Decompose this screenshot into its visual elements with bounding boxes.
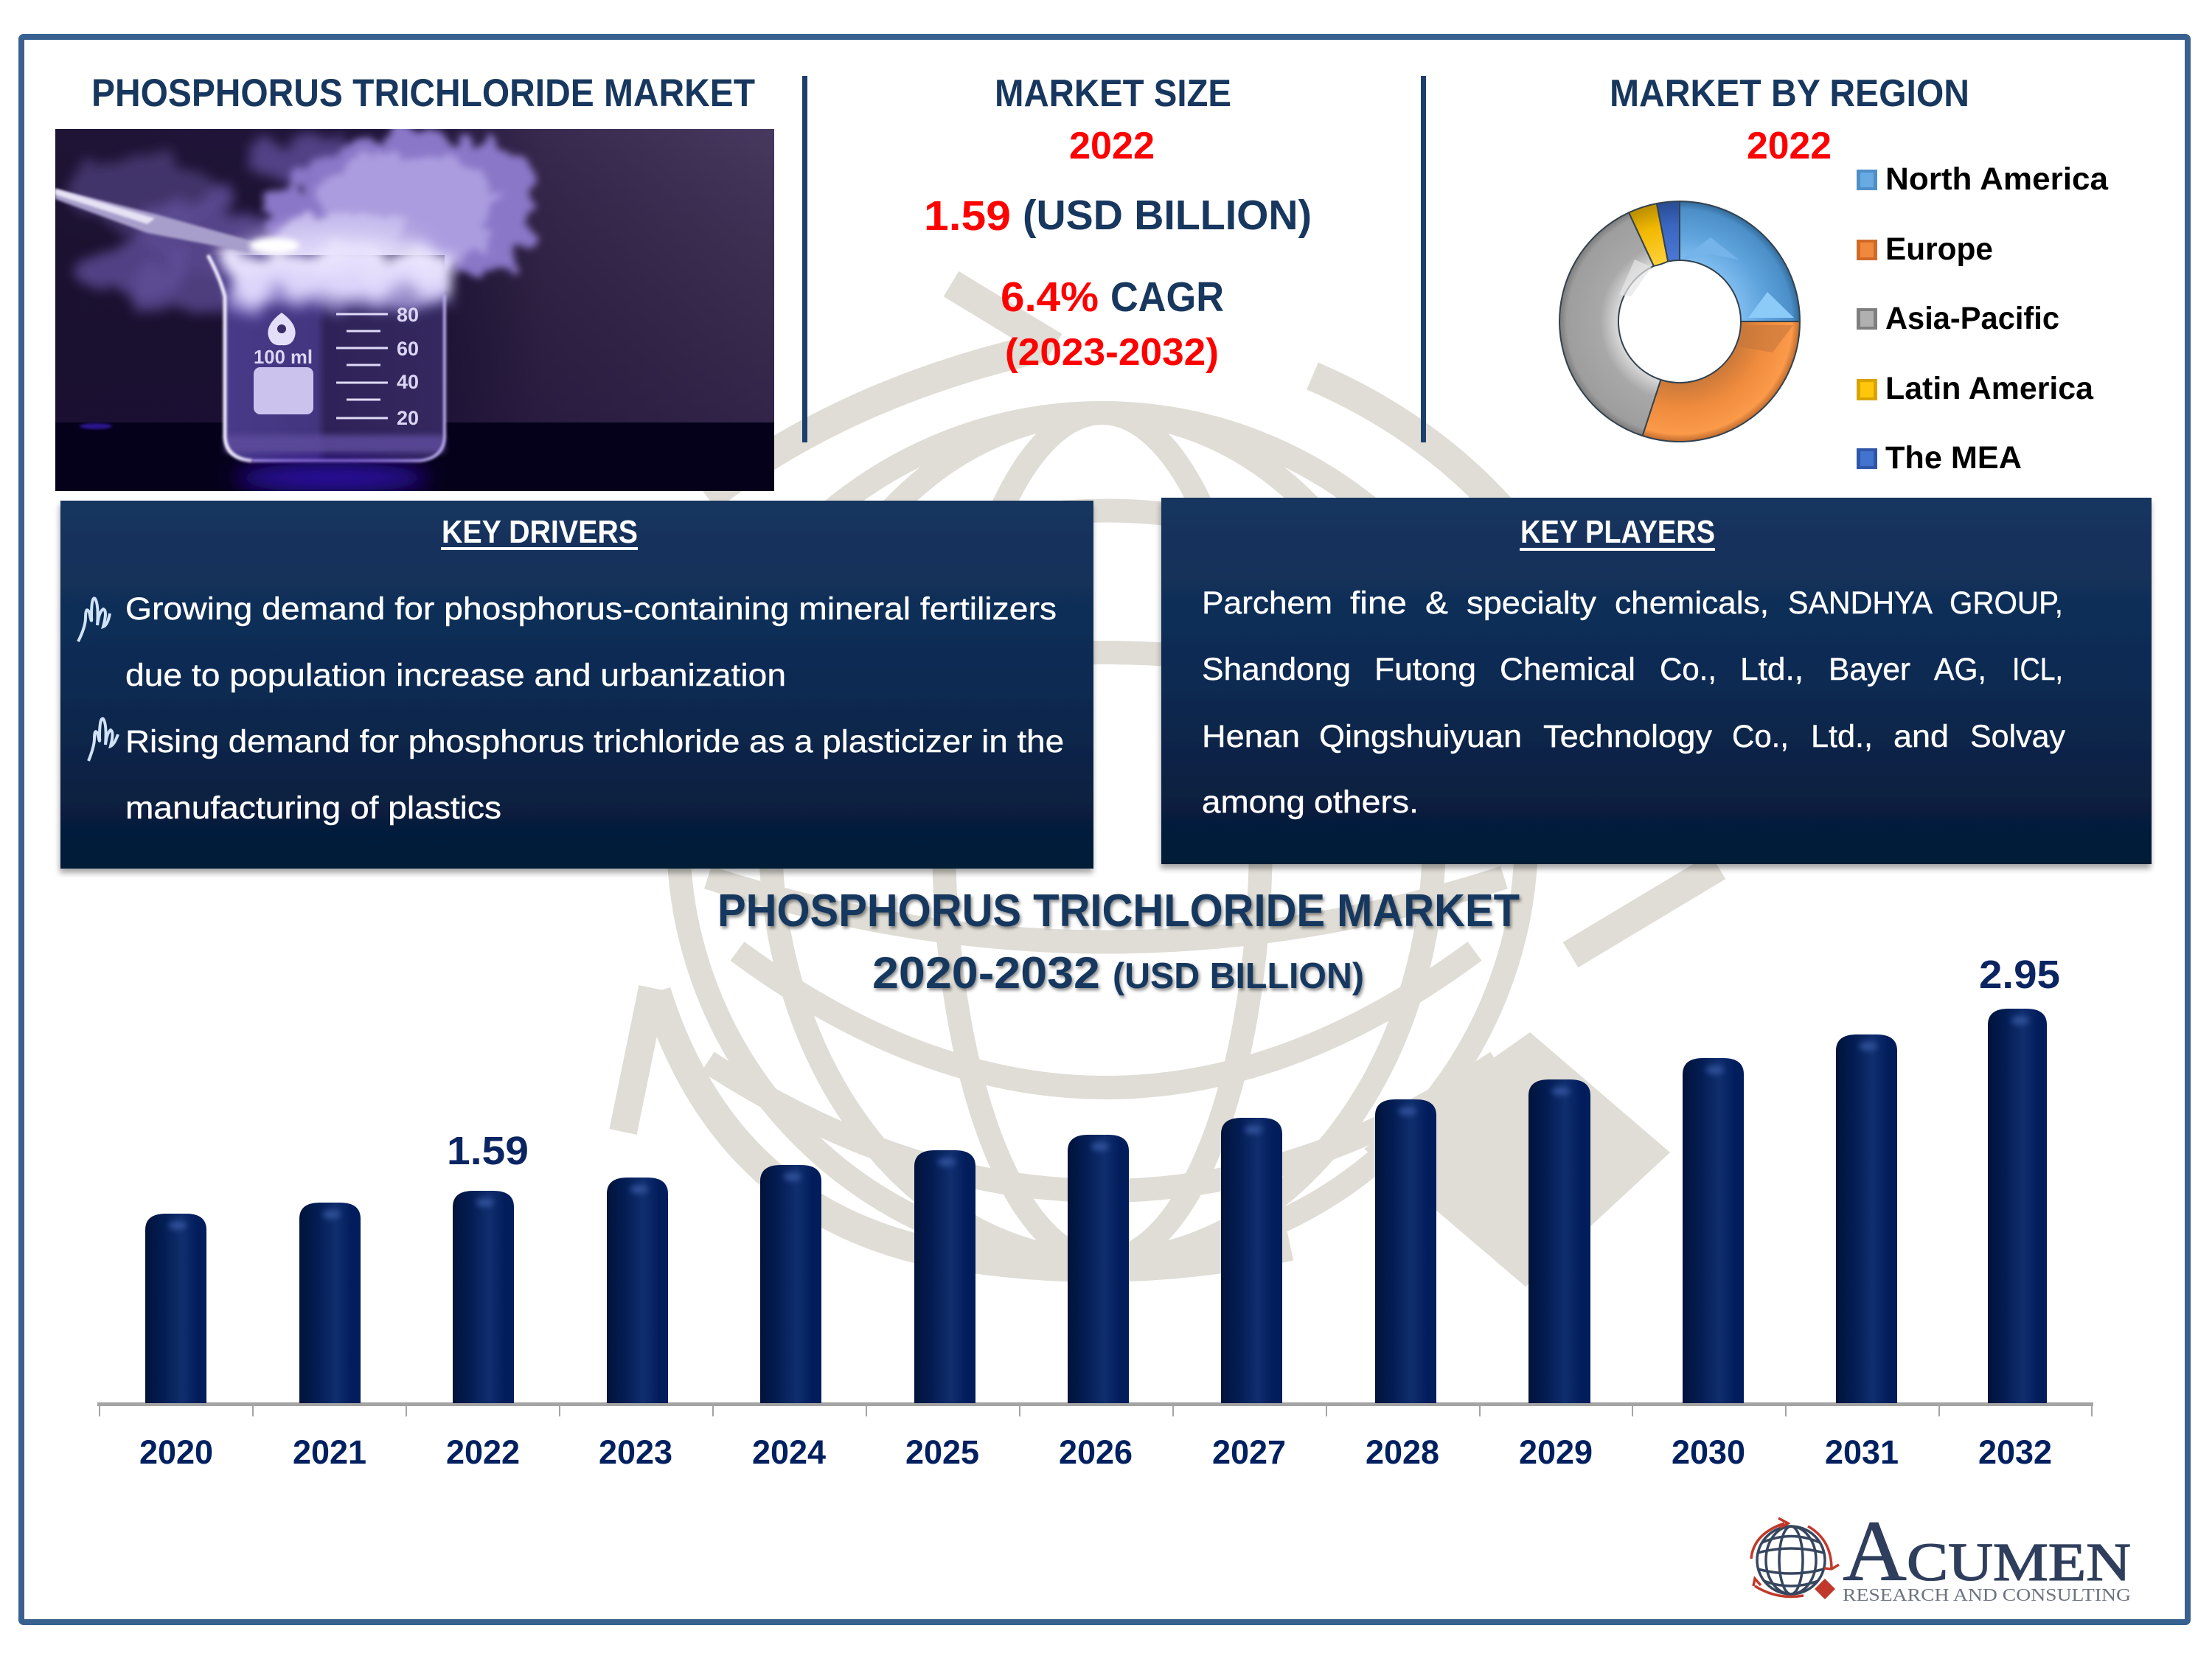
text: key players list: others.	[1314, 785, 1419, 820]
text: key players list: Ltd.,	[1740, 652, 1804, 687]
axis	[97, 1402, 2093, 1416]
bar 2021	[299, 1203, 361, 1403]
bar 2025	[914, 1150, 975, 1403]
panel: key drivers	[60, 501, 1093, 869]
text: key players list: Henan	[1202, 719, 1300, 754]
text: driver two	[125, 724, 1064, 826]
chart title: (USD BILLION)	[1113, 956, 1364, 996]
photo: fuming beaker: 20	[397, 407, 419, 429]
legend: regions: North America	[1885, 161, 2109, 197]
value label 2022: 1.59	[447, 1129, 529, 1173]
text: key players list: GROUP,	[1950, 585, 2063, 621]
year labels	[139, 1433, 2052, 1471]
chart title	[717, 886, 1520, 998]
text: key players list: Parchem	[1202, 585, 1332, 621]
year labels: 2027	[1212, 1433, 1286, 1471]
text: key players list: Co.,	[1732, 719, 1789, 754]
text: key players list: Co.,	[1660, 652, 1717, 687]
panel: market size: (USD BILLION)	[1023, 192, 1312, 239]
text: key players list: Technology	[1543, 719, 1713, 754]
divider right	[1421, 76, 1426, 442]
photo: fuming beaker: 80	[397, 304, 419, 326]
photo: fuming beaker	[55, 129, 774, 493]
panel: market by region heading: 2022	[1747, 125, 1832, 167]
text: key players list: Solvay	[1970, 719, 2065, 754]
chart title: 2020-2032	[872, 948, 1100, 998]
text: key players list: AG,	[1934, 652, 1986, 687]
text: key players list: SANDHYA	[1788, 585, 1933, 621]
panel: market size: 1.59	[924, 192, 1011, 240]
text: key players list: chemicals,	[1615, 585, 1769, 621]
bar 2020	[145, 1214, 206, 1403]
heading: key players: KEY PLAYERS	[1520, 514, 1715, 550]
photo: fuming beaker: 100 ml	[254, 346, 313, 368]
title: phosphorus trichloride market: PHOSPHORUS TRICHLORIDE MARKET	[91, 72, 755, 115]
value label 2032: 2.95	[1979, 953, 2060, 997]
legend: regions: Latin America	[1885, 371, 2094, 406]
icon: globe	[1751, 1518, 1839, 1599]
text: driver two: manufacturing of plastics	[125, 790, 501, 826]
panel: market size: 6.4%	[1001, 274, 1099, 321]
bar 2026	[1068, 1135, 1129, 1403]
year labels: 2025	[905, 1433, 979, 1471]
panel: market by region heading: MARKET BY REGION	[1610, 72, 1969, 115]
year labels: 2021	[293, 1433, 366, 1471]
panel: market size: 2022	[1069, 125, 1155, 167]
text: key players list: &	[1425, 585, 1448, 621]
bar 2027	[1221, 1118, 1282, 1403]
legend: regions: The MEA	[1885, 440, 2022, 476]
panel: market size: MARKET SIZE	[995, 72, 1231, 115]
panel: market size	[924, 72, 1312, 374]
beaker body	[208, 255, 445, 461]
year labels: 2023	[599, 1433, 672, 1471]
text: key players list	[1202, 585, 2065, 820]
legend: regions: Asia-Pacific	[1885, 301, 2059, 336]
year labels: 2024	[752, 1433, 826, 1471]
text: key players list: and	[1893, 719, 1949, 754]
text: driver one: Growing demand for phosphorus-containing mineral fertilizers	[125, 591, 1057, 627]
panel: market size: (2023-2032)	[1005, 331, 1219, 374]
text: key players list: among	[1202, 785, 1305, 820]
legend: regions	[1857, 161, 2109, 476]
bar 2031	[1836, 1034, 1897, 1403]
text: key players list: Chemical	[1500, 652, 1635, 687]
text: key players list: Futong	[1374, 652, 1476, 687]
text: key players list: Shandong	[1202, 652, 1351, 687]
donut chart: market by region	[1559, 201, 1800, 442]
year labels: 2029	[1519, 1433, 1593, 1471]
divider left	[802, 76, 807, 442]
bar 2024	[760, 1165, 821, 1403]
text: key players list: specialty	[1467, 585, 1597, 621]
logo: acumen research and consulting: A	[1843, 1503, 1907, 1599]
legend: regions: Europe	[1885, 232, 1993, 267]
year labels: 2022	[446, 1433, 520, 1471]
bar 2029	[1528, 1079, 1590, 1403]
text: driver one: due to population increase and urbanization	[125, 658, 786, 693]
text: driver one	[125, 591, 1057, 693]
text: key players list: Bayer	[1829, 652, 1910, 687]
year labels: 2030	[1672, 1433, 1745, 1471]
panel: key players	[1161, 498, 2152, 864]
heading: key drivers: KEY DRIVERS	[442, 514, 638, 550]
bar 2023	[607, 1178, 668, 1403]
text: key players list: ICL,	[2012, 652, 2063, 687]
panel: market size: CAGR	[1110, 274, 1224, 321]
logo: acumen research and consulting: RESEARCH AND CONSULTING	[1843, 1586, 2131, 1605]
icon: bullet one	[78, 599, 110, 641]
photo: fuming beaker: 60	[397, 338, 419, 360]
bar 2032	[1988, 1009, 2047, 1403]
logo: acumen research and consulting: CUMEN	[1907, 1532, 2131, 1592]
text: key players list: Ltd.,	[1811, 719, 1873, 754]
bar 2028	[1375, 1099, 1436, 1403]
year labels: 2028	[1366, 1433, 1439, 1471]
icon: bullet two	[88, 719, 118, 761]
logo: acumen research and consulting	[1751, 1503, 2131, 1605]
year labels: 2031	[1825, 1433, 1899, 1471]
bar 2022	[453, 1191, 514, 1403]
text: key players list: Qingshuiyuan	[1319, 719, 1522, 754]
bar 2030	[1683, 1058, 1744, 1403]
year labels: 2020	[139, 1433, 213, 1471]
text: driver two: Rising demand for phosphorus trichloride as a plasticizer in the	[125, 724, 1064, 759]
bar chart: market 2020-2032	[97, 953, 2093, 1471]
chart title: PHOSPHORUS TRICHLORIDE MARKET	[717, 886, 1520, 936]
watermark: large globe logo	[623, 284, 1718, 1287]
year labels: 2032	[1978, 1433, 2052, 1471]
photo: fuming beaker: 40	[397, 371, 419, 393]
panel: market by region heading	[1610, 72, 1969, 167]
text: key players list: fine	[1350, 585, 1407, 621]
year labels: 2026	[1059, 1433, 1133, 1471]
